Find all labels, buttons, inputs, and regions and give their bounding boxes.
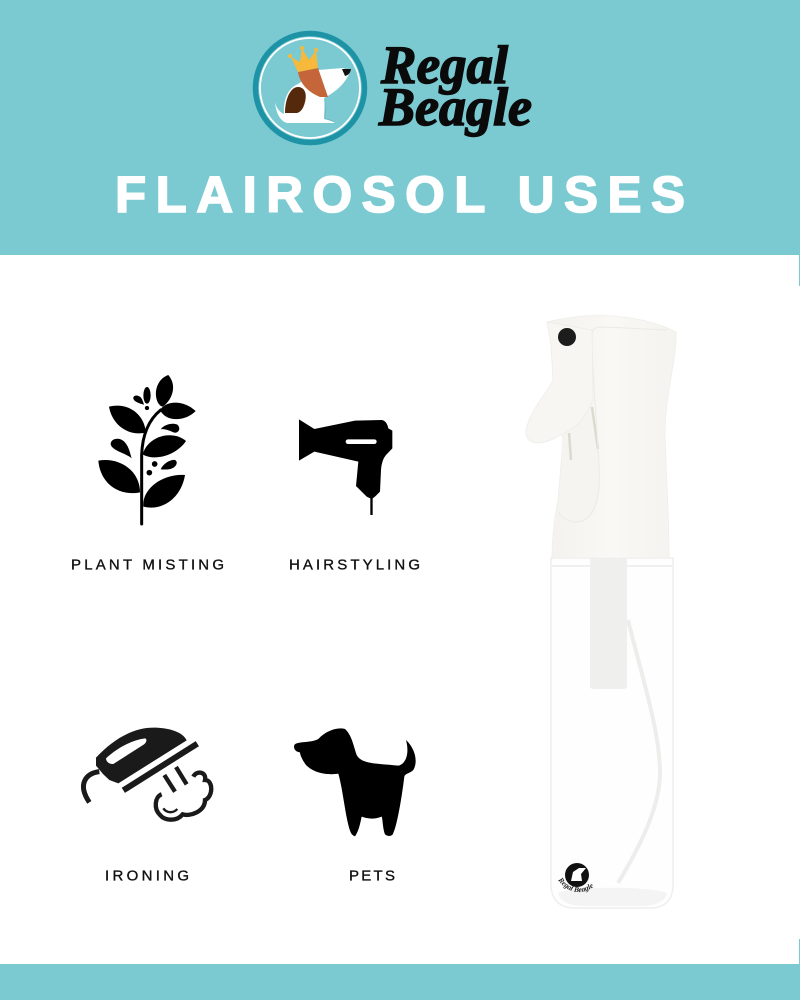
bottle mini logo bbox=[558, 863, 594, 892]
logo wordmark: Regal bbox=[380, 35, 508, 95]
label: pets: PETS bbox=[349, 868, 395, 884]
spray head bbox=[547, 316, 676, 558]
label: ironing: IRONING bbox=[105, 868, 189, 884]
label: plant misting: PLANT MISTING bbox=[71, 556, 224, 574]
bottle mini logo: Regal Beagle bbox=[558, 878, 594, 892]
icon: iron with steam bbox=[83, 728, 211, 820]
footer band bbox=[0, 939, 800, 1000]
header band bbox=[0, 0, 800, 286]
inner tube bbox=[590, 555, 627, 689]
logo bbox=[256, 34, 532, 142]
bottle body bbox=[551, 558, 673, 908]
logo wordmark: Beagle bbox=[378, 77, 532, 137]
logo badge: crowned beagle bbox=[256, 34, 364, 142]
icon: hair dryer bbox=[299, 419, 392, 515]
icon: dog silhouette bbox=[294, 728, 416, 836]
product photo: spray bottle bbox=[526, 315, 676, 909]
icon: plant bbox=[98, 375, 196, 524]
dip straw bbox=[618, 620, 660, 883]
trigger bbox=[526, 322, 593, 443]
title: FLAIROSOL USES bbox=[115, 166, 685, 223]
label: hairstyling: HAIRSTYLING bbox=[289, 556, 420, 574]
logo wordmark bbox=[378, 35, 532, 137]
nozzle dot bbox=[558, 328, 576, 346]
